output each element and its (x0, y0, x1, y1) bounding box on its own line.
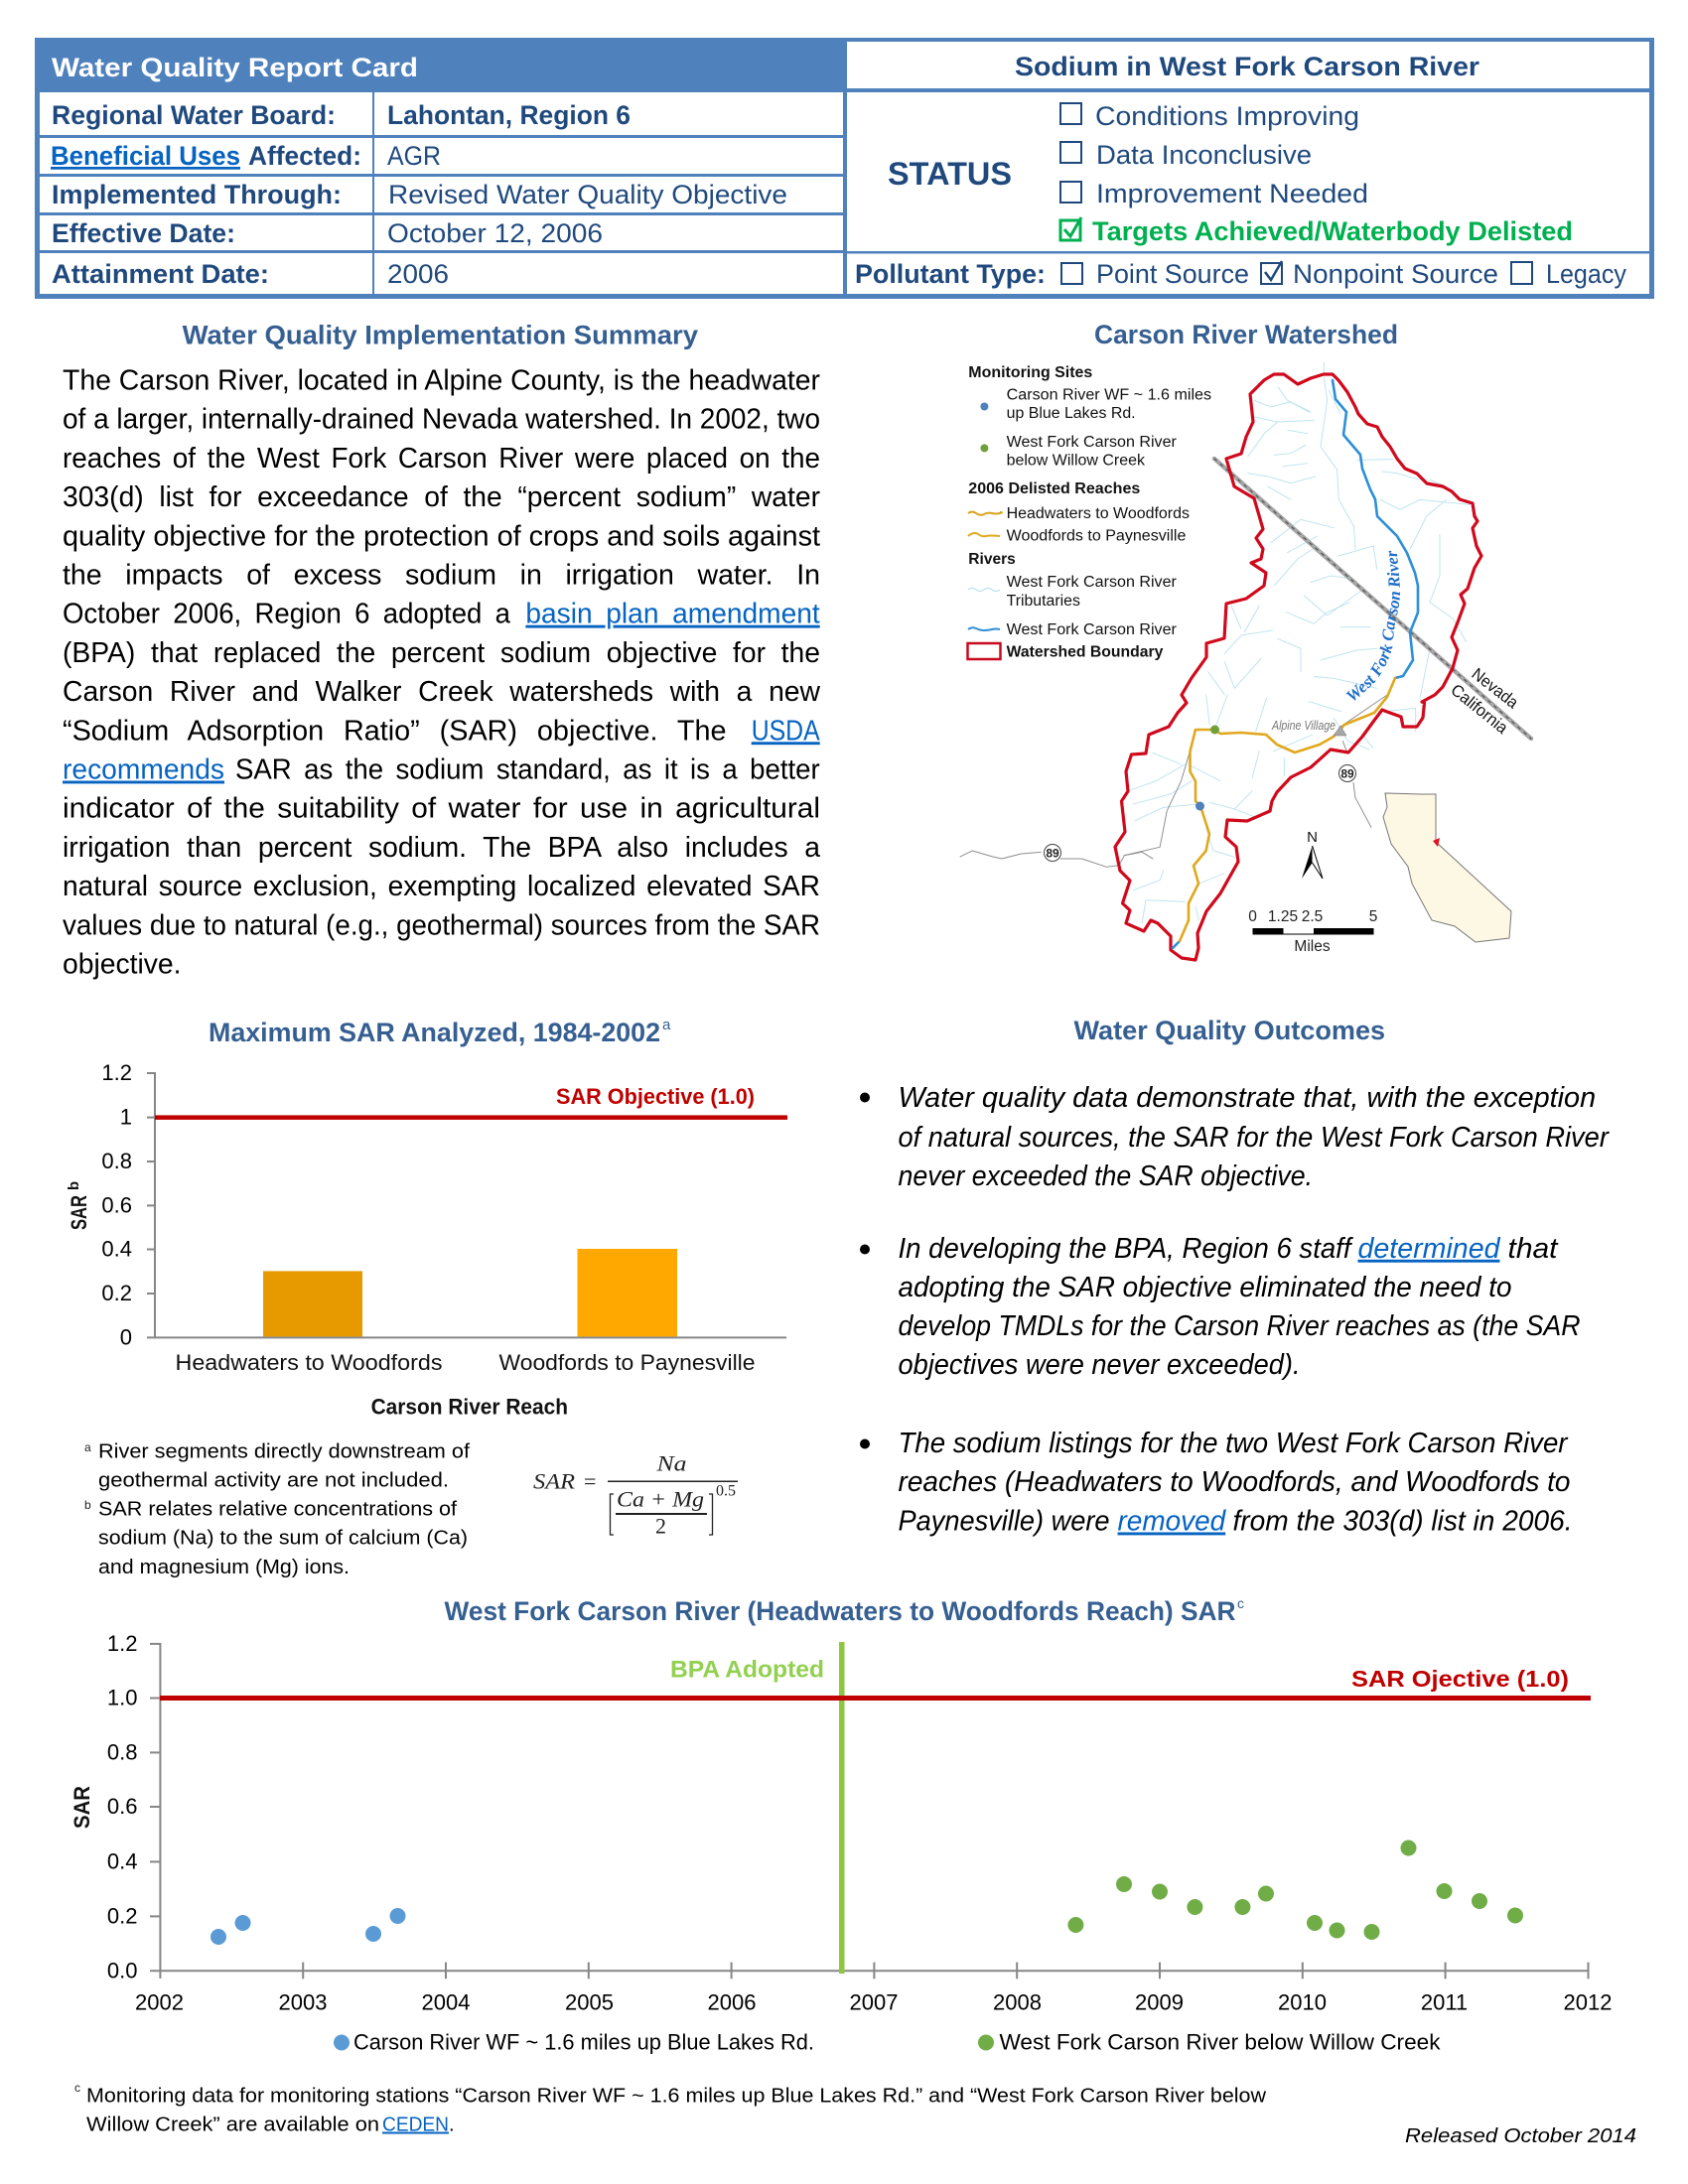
status checklist: Targets Achieved/Waterbody Delisted (1092, 216, 1573, 246)
row: implemented through: Implemented Through: (52, 180, 342, 209)
map legend: Woodfords to Paynesville (1007, 528, 1186, 545)
chart legend (334, 2029, 1442, 2055)
footnotes a and b: a (84, 1440, 91, 1454)
outcome bullet 3 (860, 1428, 1573, 1537)
outcome bullet 1 (860, 1082, 1610, 1192)
y axis labels (101, 1060, 132, 1349)
highway 89 shields: 89 (1046, 846, 1059, 860)
scale bar: 5 (1369, 908, 1377, 925)
state labels: Nevada (1469, 664, 1522, 713)
y axis labels: 0.4 (107, 1848, 137, 1874)
scale bar: Miles (1294, 938, 1331, 955)
x axis labels: 2009 (1135, 1989, 1184, 2015)
release date: Released October 2014 (1405, 2125, 1636, 2147)
highway 89 shields: 89 (1340, 766, 1354, 780)
report card header table (35, 38, 1654, 299)
SAR formula: Na (655, 1451, 687, 1475)
summary body text: The Carson River, located in Alpine County, is the headwater (63, 365, 820, 397)
california inset (1383, 793, 1511, 942)
river name label: West Fork Carson River (1346, 550, 1400, 701)
y axis labels: 0.6 (101, 1192, 132, 1217)
SAR formula: = (584, 1469, 596, 1493)
outcome bullet 2: In developing the BPA, Region 6 staff (898, 1233, 1353, 1265)
y axis labels: 0.8 (101, 1149, 132, 1173)
y axis labels: 0.4 (101, 1237, 132, 1261)
summary body text: October 2006, Region 6 adopted a (63, 599, 511, 630)
x axis labels: 2008 (993, 1989, 1042, 2015)
y axis labels: 0.2 (107, 1904, 137, 1928)
tributaries upper basin (1208, 362, 1470, 698)
SAR objective label: SAR Ojective (1.0) (1351, 1666, 1569, 1692)
outcome bullet 2: adopting the SAR objective eliminated the need to (898, 1272, 1511, 1303)
x axis labels: 2002 (135, 1989, 184, 2015)
outcome bullet 3: from the 303(d) list in 2006. (1233, 1505, 1573, 1537)
y axis labels: 1 (120, 1105, 132, 1130)
status checklist (1060, 101, 1573, 246)
map legend: Watershed Boundary (1007, 643, 1164, 660)
x axis labels: 2006 (708, 1989, 756, 2015)
row: beneficial uses: Beneficial Uses (51, 141, 240, 171)
x axis labels: 2004 (422, 1989, 470, 2015)
SAR formula: 2 (655, 1513, 666, 1539)
summary body text: values due to natural (e.g., geothermal) sources from the SAR (63, 909, 820, 941)
north arrow (1302, 829, 1323, 879)
outcome bullet 3: reaches (Headwaters to Woodfords, and Woodfords to (898, 1466, 1571, 1498)
outcome bullet 3: Paynesville) were (898, 1505, 1110, 1537)
map legend: Rivers (968, 551, 1016, 568)
summary body text: of a larger, internally-drained Nevada watershed. In 2002, two (63, 404, 820, 436)
summary body text: recommends (63, 754, 224, 786)
row: attainment date: 2006 (387, 259, 449, 289)
north arrow: N (1307, 829, 1318, 846)
map legend: up Blue Lakes Rd. (1007, 405, 1136, 422)
BPA adopted line (839, 1642, 844, 1974)
pollutant type row (855, 259, 1626, 289)
footnote c (74, 2081, 1267, 2136)
outcome bullet 2 (860, 1233, 1581, 1381)
row: beneficial uses: AGR (387, 141, 441, 171)
summary body text (63, 365, 821, 981)
y axis title: SAR (70, 1786, 94, 1829)
row: beneficial uses: Affected: (248, 141, 361, 171)
footnote c: Monitoring data for monitoring stations “Carson River WF ~ 1.6 miles up Blue Lakes Rd.” and “West Fork Carson River below (86, 2085, 1267, 2107)
outcome bullet 3: The sodium listings for the two West Fork Carson River (898, 1428, 1569, 1459)
outcome bullet 2: develop TMDLs for the Carson River reaches as (the SAR (898, 1310, 1581, 1342)
x axis labels (175, 1350, 755, 1375)
row: attainment date (52, 259, 449, 289)
monitoring site markers (1196, 725, 1219, 810)
watershed boundary (1115, 374, 1481, 960)
footnotes a and b: b (84, 1498, 91, 1512)
x axis labels: 2005 (565, 1989, 614, 2015)
summary body text: basin plan amendment (525, 599, 820, 630)
series: carson river wf (211, 1908, 405, 1945)
title: sodium in west fork carson river: Sodium in West Fork Carson River (1015, 52, 1480, 81)
row: effective date: October 12, 2006 (387, 218, 603, 248)
row: attainment date: Attainment Date: (52, 259, 269, 289)
row: regional water board: Lahontan, Region 6 (387, 100, 631, 130)
y axis labels: 0.6 (107, 1794, 137, 1819)
outcome bullet 2: objectives were never exceeded). (898, 1349, 1301, 1381)
row: regional water board (52, 100, 631, 130)
pollutant type row: Nonpoint Source (1293, 259, 1498, 289)
summary body text: (BPA) that replaced the percent sodium objective for the (63, 637, 820, 669)
SAR objective line (155, 1115, 787, 1120)
SAR formula: 0.5 (716, 1483, 736, 1499)
map legend: below Willow Creek (1007, 453, 1145, 470)
bar: woodfords to paynesville (578, 1249, 677, 1336)
outcome bullet 1: of natural sources, the SAR for the West Fork Carson River (898, 1122, 1610, 1154)
footnotes a and b: sodium (Na) to the sum of calcium (Ca) (98, 1527, 468, 1549)
map legend: Headwaters to Woodfords (1007, 505, 1190, 522)
y axis labels: 0.2 (101, 1281, 132, 1305)
heading: bar chart: a (662, 1017, 671, 1033)
footnote c: c (74, 2081, 80, 2095)
delisted reaches (1180, 678, 1395, 941)
map legend: West Fork Carson River (1007, 434, 1177, 451)
y axis labels: 0.8 (107, 1739, 137, 1765)
x axis title: Carson River Reach (371, 1394, 568, 1420)
SAR formula (533, 1451, 738, 1539)
map legend: Carson River WF ~ 1.6 miles (1007, 386, 1211, 403)
x axis labels: 2012 (1564, 1989, 1612, 2015)
summary body text: objective. (63, 949, 181, 981)
row: regional water board: Regional Water Board: (52, 100, 336, 130)
footnote c: CEDEN (382, 2115, 449, 2136)
west fork river (1173, 380, 1418, 948)
summary body text: indicator of the suitability of water for use in agricultural (63, 793, 820, 825)
y axis title: b (66, 1181, 82, 1190)
row: beneficial uses (51, 141, 441, 171)
heading: carson river watershed: Carson River Watershed (1094, 320, 1398, 349)
chart legend: West Fork Carson River below Willow Creek (999, 2029, 1442, 2055)
alpine village marker: Alpine Village (1271, 718, 1336, 733)
highway 89 shields (1045, 764, 1356, 862)
axes (150, 1643, 1589, 1979)
x axis labels (135, 1989, 1612, 2015)
footnotes a and b (84, 1440, 470, 1578)
tributaries lower basin (1128, 695, 1416, 923)
scatter chart: SAR over time (70, 1631, 1612, 2055)
pollutant type row: Pollutant Type: (855, 259, 1046, 289)
row: implemented through: Revised Water Quality Objective (388, 180, 787, 209)
map legend: West Fork Carson River (1007, 574, 1177, 591)
heading: bar chart: Maximum SAR Analyzed, 1984-2002 (209, 1018, 660, 1047)
x axis labels: Woodfords to Paynesville (498, 1350, 755, 1375)
BPA adopted label: BPA Adopted (670, 1656, 824, 1684)
scale bar (1248, 908, 1377, 955)
x axis labels: 2003 (279, 1989, 327, 2015)
chart legend: Carson River WF ~ 1.6 miles up Blue Lakes Rd. (353, 2029, 814, 2055)
summary body text: quality objective for the protection of crops and soils against (63, 520, 820, 552)
y axis labels: 0.0 (107, 1958, 137, 1983)
footnotes a and b: geothermal activity are not included. (98, 1469, 449, 1491)
status checklist: Conditions Improving (1095, 101, 1359, 131)
scale bar: 1.25 (1268, 908, 1298, 925)
summary body text: natural source exclusion, exempting localized elevated SAR (63, 871, 820, 902)
summary body text: “Sodium Adsorption Ratio” (SAR) objective. The (63, 715, 727, 747)
heading: scatter chart: West Fork Carson River (Headwaters to Woodfords Reach) SAR (445, 1596, 1235, 1626)
summary body text: irrigation than percent sodium. The BPA also includes a (63, 832, 821, 864)
x axis labels: 2011 (1421, 1989, 1468, 2015)
bar chart: maximum SAR (66, 1060, 787, 1420)
outcome bullet 1: never exceeded the SAR objective. (898, 1160, 1313, 1192)
footnote c: . (449, 2115, 455, 2136)
heading: implementation summary: Water Quality Implementation Summary (183, 320, 698, 349)
map legend: 2006 Delisted Reaches (968, 480, 1140, 497)
footnote c: Willow Creek” are available on (86, 2115, 379, 2136)
status checklist: Data Inconclusive (1096, 140, 1312, 170)
summary body text: the impacts of excess sodium in irrigation water. In (63, 560, 820, 592)
pollutant type row: Point Source (1096, 259, 1249, 289)
SAR objective label: SAR Objective (1.0) (556, 1084, 755, 1109)
heading: water quality outcomes: Water Quality Outcomes (1074, 1016, 1385, 1045)
summary body text: reaches of the West Fork Carson River were placed on the (63, 443, 820, 475)
y axis title: SAR (67, 1195, 91, 1230)
summary body text: SAR as the sodium standard, as it is a better (235, 754, 820, 786)
SAR formula: SAR (533, 1469, 576, 1493)
outcome bullet 1: Water quality data demonstrate that, with the exception (898, 1082, 1596, 1114)
y axis labels: 0 (120, 1324, 132, 1349)
x axis labels: Headwaters to Woodfords (175, 1350, 443, 1375)
row: implemented through (52, 180, 787, 209)
row: effective date: Effective Date: (52, 218, 235, 248)
outcome bullet 2: that (1507, 1233, 1560, 1265)
footnotes a and b: SAR relates relative concentrations of (98, 1499, 457, 1521)
map: carson river watershed (959, 361, 1533, 962)
map legend (967, 364, 1211, 660)
y axis labels: 1.2 (101, 1060, 132, 1085)
outcome bullet 3: removed (1118, 1505, 1226, 1537)
bar: headwaters to woodfords (263, 1271, 362, 1336)
map legend: Monitoring Sites (968, 364, 1092, 381)
row: effective date (52, 218, 603, 248)
state labels: California (1447, 680, 1512, 738)
status checklist: Improvement Needed (1096, 179, 1368, 208)
scale bar: 2.5 (1302, 908, 1323, 925)
SAR objective line (160, 1696, 1591, 1701)
status label: STATUS (888, 156, 1012, 192)
roads (960, 695, 1387, 867)
title: report card: Water Quality Report Card (52, 53, 418, 82)
heading: scatter chart: c (1237, 1595, 1244, 1611)
summary body text: Carson River and Walker Creek watersheds with a new (63, 676, 821, 708)
y axis labels: 1.0 (107, 1686, 137, 1709)
series: west fork below willow creek (1067, 1841, 1523, 1940)
x axis labels: 2010 (1278, 1989, 1327, 2015)
scale bar: 0 (1248, 908, 1257, 925)
outcome bullet 2: determined (1358, 1233, 1500, 1265)
pollutant type row: Legacy (1546, 259, 1626, 289)
x axis labels: 2007 (850, 1989, 898, 2015)
summary body text: 303(d) list for exceedance of the “percent sodium” water (63, 481, 820, 513)
state line (1214, 459, 1531, 739)
map legend: West Fork Carson River (1007, 621, 1177, 638)
footnotes a and b: River segments directly downstream of (98, 1441, 470, 1463)
y axis labels (107, 1631, 137, 1983)
y axis labels: 1.2 (107, 1631, 137, 1656)
summary body text: USDA (752, 715, 820, 747)
SAR formula: Ca + Mg (617, 1487, 704, 1511)
inset location marker (1433, 838, 1440, 847)
footnotes a and b: and magnesium (Mg) ions. (98, 1557, 350, 1578)
map legend: Tributaries (1007, 593, 1080, 610)
state labels (1447, 664, 1522, 738)
